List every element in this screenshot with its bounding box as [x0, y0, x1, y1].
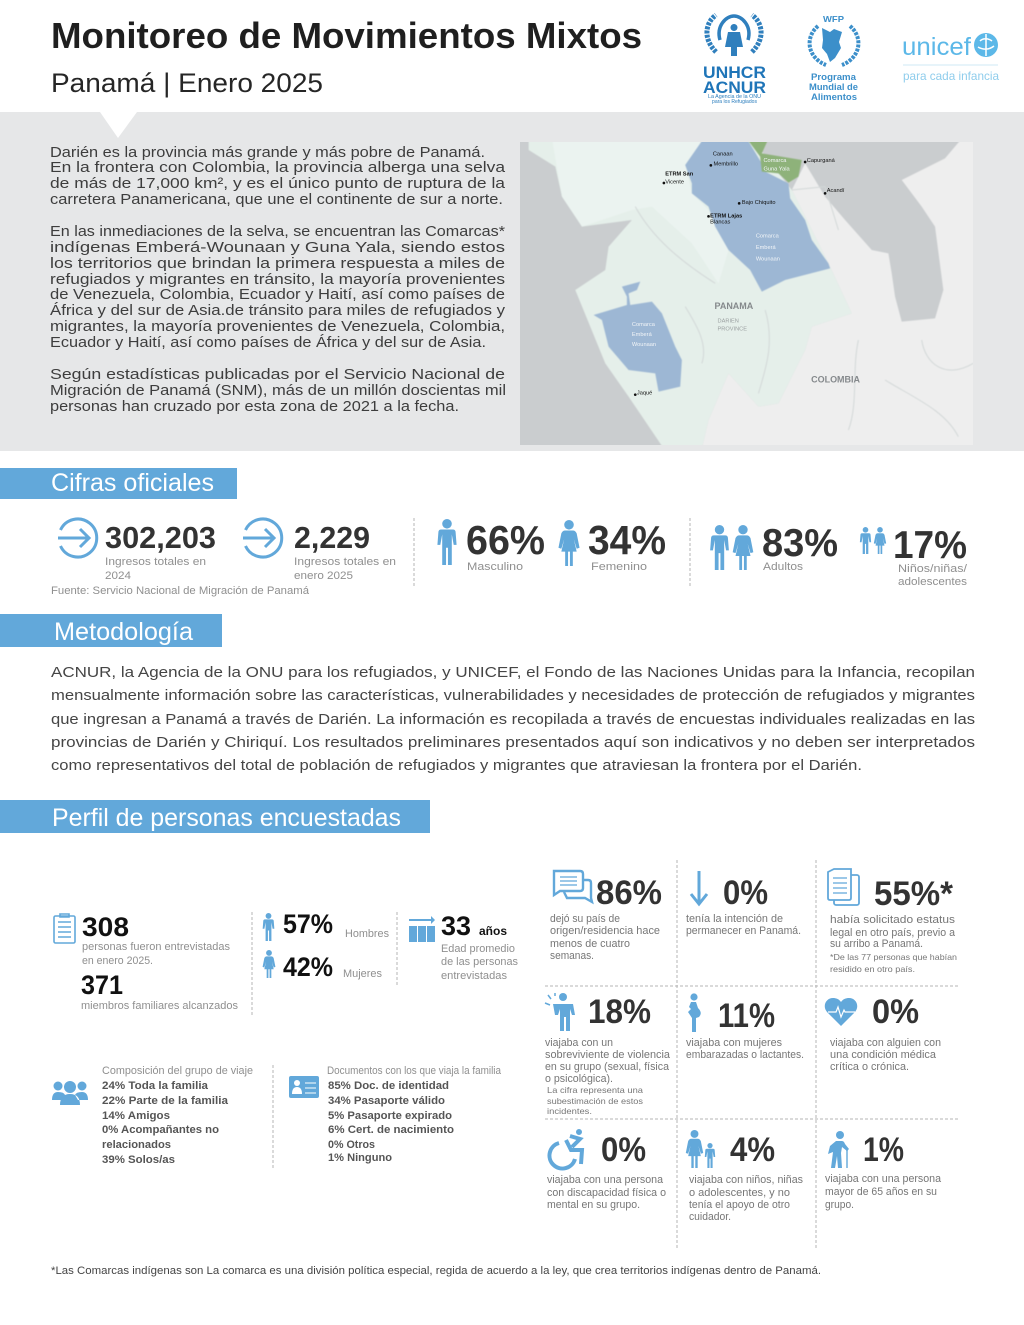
map: Darién province: Vicente	[665, 180, 684, 186]
stat: 33 years: Edad promedio	[441, 943, 515, 955]
cell: 11%: 11%	[718, 997, 775, 1035]
cell: 0% medical: crítica o crónica.	[830, 1061, 909, 1073]
cell: 11%	[686, 993, 804, 1061]
stat: 17% children: adolescentes	[898, 576, 968, 588]
stat: 2,229: enero 2025	[294, 570, 353, 582]
cell: 86%: semanas.	[550, 950, 594, 962]
context text: Según estadísticas publicadas por el Servicio Nacional de	[50, 366, 505, 383]
text: methodology: mensualmente información sobre las características, vulnerabilidades y necesidades de protección de refugiados y migrantes	[51, 687, 975, 704]
map: Darién province: Wounaan	[632, 342, 656, 348]
cell: 86%: 86%	[596, 874, 662, 912]
subtitle: Panamá | Enero 2025	[51, 68, 323, 98]
panel: context band	[0, 112, 1024, 451]
logo: UNHCR ACNUR: UNHCR	[703, 63, 766, 82]
stat: 57% men: Hombres	[345, 928, 389, 940]
icon: elderly person	[828, 1131, 849, 1168]
logo: UNHCR ACNUR: para los Refugiados	[712, 99, 757, 105]
cell: 0% intend to stay	[686, 871, 801, 937]
icon: pregnant woman	[688, 993, 701, 1032]
logo: WFP	[809, 14, 858, 102]
text: documents list: 6% Cert. de nacimiento	[328, 1124, 454, 1136]
cell: 18%: en su grupo (sexual, física	[545, 1061, 670, 1073]
context text	[50, 144, 506, 415]
panel: travel group composition	[52, 1065, 253, 1166]
icon: entry arrow 2024	[58, 519, 97, 557]
stat: 83% adultos: Adultos	[763, 561, 804, 573]
cell: 4%: o adolescentes, y no	[689, 1187, 790, 1199]
cell: 1%: mayor de 65 años en su	[825, 1186, 937, 1198]
icon: documents	[828, 869, 859, 905]
heading: Perfil de personas encuestadas: Perfil de personas encuestadas	[52, 804, 401, 832]
context text: Darién es la provincia más grande y más pobre de Panamá.	[50, 144, 485, 161]
map: Darién province: PANAMA	[715, 301, 754, 311]
icon: wheelchair	[549, 1130, 582, 1169]
context text: refugiados y migrantes en tránsito, la mayoría provenientes	[50, 271, 505, 288]
icon: adult with child	[686, 1130, 715, 1168]
stat: 17% children: Niños/niñas/	[898, 563, 968, 575]
heading: Perfil de personas encuestadas	[0, 800, 430, 833]
cell: 18%: incidentes.	[547, 1106, 592, 1116]
stat: 33 years: entrevistadas	[441, 970, 507, 982]
text: composition list: relacionados	[102, 1139, 171, 1151]
text: composition list: 39% Solos/as	[102, 1154, 175, 1166]
text: documents list: 5% Pasaporte expirado	[328, 1110, 452, 1122]
cell: 86%: menos de cuatro	[550, 938, 630, 950]
icon: clipboard	[54, 914, 75, 943]
stat: 17% children: 17%	[893, 524, 967, 567]
map: Darién province: COLOMBIA	[811, 375, 861, 385]
heading: Metodología: Metodología	[54, 618, 193, 646]
cell: 0% disability: 0%	[601, 1131, 646, 1169]
stat: 33 years	[441, 911, 518, 982]
cell: 86%: origen/residencia hace	[550, 925, 660, 937]
stat: 66% masculino: 66%	[466, 517, 545, 563]
stat: 33 years: de las personas	[441, 956, 518, 968]
stat: 302,203: Ingresos totales en	[105, 556, 206, 568]
cell: 0% medical: una condición médica	[830, 1049, 937, 1061]
cell: 11%: viajaba con mujeres	[686, 1037, 782, 1049]
text: methodology: que ingresan a Panamá a través de Darién. La información es recopilada a través de encuestas individuales realizadas en las	[51, 711, 975, 728]
cell: 18%: sobreviviente de violencia	[545, 1049, 671, 1061]
stat: 308 interviewed: personas fueron entrevistadas	[82, 941, 230, 953]
context text: de más de 17,000 km², y es el único punto de ruptura de la	[50, 175, 506, 192]
text: composition list: 22% Parte de la familia	[102, 1095, 229, 1107]
panel: official figures	[51, 517, 968, 597]
map: Darién province: Blancas	[710, 220, 730, 226]
map: Darién province: Jaqué	[637, 391, 652, 397]
stat: 83% adultos: 83%	[762, 522, 838, 565]
cell: 11%: embarazadas o lactantes.	[686, 1049, 804, 1061]
text: composition list: 24% Toda la familia	[102, 1080, 209, 1092]
map: Darién province: Comarca	[632, 322, 656, 328]
cell: 0% disability	[547, 1130, 666, 1211]
cell: 55%	[828, 869, 957, 974]
cell: 0% medical: 0%	[872, 993, 919, 1031]
stat: 42% women: Mujeres	[343, 968, 382, 980]
stat: 302,203	[105, 520, 216, 582]
map: Darién province	[520, 142, 972, 445]
stat: 57% men	[283, 909, 389, 940]
map: Darién province: Comarca	[763, 158, 787, 164]
cell: 0% medical	[825, 993, 941, 1073]
text: documents list: Documentos con los que viaja la familia	[327, 1065, 502, 1077]
stat: 42% women: 42%	[283, 952, 333, 982]
cell: 4%: 4%	[730, 1131, 775, 1169]
icon: down arrow	[691, 871, 707, 904]
text: composition list: 14% Amigos	[102, 1110, 170, 1122]
cell: 55%: había solicitado estatus	[830, 914, 956, 926]
cell: 0% intend to stay: tenía la intención de	[686, 913, 783, 925]
context text: migrantes, la mayoría provenientes de Venezuela, Colombia,	[50, 318, 505, 335]
text: composition list	[102, 1065, 253, 1166]
cell: 18%	[545, 993, 671, 1116]
panel: respondents summary	[54, 909, 518, 1015]
text: methodology: ACNUR, la Agencia de la ONU para los refugiados, y UNICEF, el Fondo de las Naciones Unidas para la Infancia, recopilan	[51, 664, 975, 681]
icon: ID card	[289, 1076, 319, 1098]
stat: 33 years: años	[479, 924, 507, 938]
context text: Migración de Panamá (SNM), más de un millón doscientas mil	[50, 382, 506, 399]
text: documents list: 85% Doc. de identidad	[328, 1080, 449, 1092]
cell: 18%: 18%	[588, 993, 651, 1031]
stat: 33 years: 33	[441, 911, 471, 941]
heading: Cifras oficiales	[0, 468, 237, 499]
source note: Fuente: Servicio Nacional de Migración de Panamá	[51, 585, 310, 597]
context text: En la frontera con Colombia, la provincia alberga una selva	[50, 159, 506, 176]
map: Darién province: PROVINCE	[718, 327, 747, 333]
text: methodology: provincias de Darién y Chiriquí. Los resultados preliminares presentados aquí son indicativos y no deben ser interpretados	[51, 734, 975, 751]
cell: 86%	[550, 871, 662, 962]
context text: Ecuador y Haití, así como países de África y del sur de Asia.	[50, 334, 486, 351]
stat: 302,203: 2024	[105, 570, 131, 582]
text: documents list	[327, 1065, 502, 1164]
stat: 371 family members: miembros familiares alcanzados	[81, 1000, 238, 1012]
logo: unicef: unicef	[902, 33, 971, 61]
panel: protection indicators grid	[545, 860, 958, 1250]
logo: unicef	[902, 33, 999, 83]
text: methodology	[51, 664, 975, 774]
cell: 55%: legal en otro país, previo a	[830, 927, 956, 939]
stat: 66% masculino: Masculino	[467, 561, 523, 573]
stat: 34% femenino: Femenino	[591, 561, 647, 573]
stat: 2,229: 2,229	[294, 520, 370, 555]
stat: 308 interviewed: 308	[82, 912, 129, 942]
cell: 1%: viajaba con una persona	[825, 1173, 942, 1185]
map: Darién province: ETRM San	[665, 171, 694, 177]
cell: 4%: cuidador.	[689, 1211, 731, 1223]
stat: 17% children	[893, 524, 968, 588]
cell: 55%: residido en otro país.	[830, 964, 915, 974]
map: Darién province: Emberá	[756, 245, 776, 251]
cell: 0% intend to stay: permanecer en Panamá.	[686, 925, 801, 937]
text: documents list: 0% Otros	[328, 1139, 375, 1151]
cell: 18%: o psicológica).	[545, 1073, 613, 1085]
cell: 18%: subestimación de estos	[547, 1096, 643, 1106]
context text: de Venezuela, Colombia, Ecuador y Haití, así como países de	[50, 286, 505, 303]
icon: heart with pulse	[825, 998, 857, 1026]
logo: WFP: Mundial de	[809, 82, 858, 92]
cell: 0% disability: mental en su grupo.	[547, 1199, 640, 1211]
cell: 4%: tenía el apoyo de otro	[689, 1199, 790, 1211]
map: Darién province: ETRM Lajas	[710, 213, 742, 219]
icon: man	[263, 913, 274, 941]
stat: 371 family members: 371	[81, 970, 123, 1000]
map: Darién province: Guna Yala	[763, 167, 791, 173]
cell: 4%: viajaba con niños, niñas	[689, 1174, 803, 1186]
icon: group of people	[52, 1081, 88, 1105]
context text: En las inmediaciones de la selva, se encuentran las Comarcas*	[50, 223, 505, 240]
cell: 0% disability: con discapacidad física o	[547, 1187, 666, 1199]
context text: carretera Panamericana, que une el continente de sur a norte.	[50, 191, 503, 208]
logo: unicef: para cada infancia	[903, 69, 999, 83]
logo: WFP: WFP	[823, 14, 844, 24]
title: Monitoreo de Movimientos Mixtos	[51, 15, 642, 56]
footnote: *Las Comarcas indígenas son La comarca es una división política especial, regida de acuerdo a la ley, que crea territorios indígenas dentro de Panamá.	[51, 1265, 821, 1277]
stat: 302,203: 302,203	[105, 520, 216, 555]
cell: 0% medical: viajaba con alguien con	[830, 1037, 941, 1049]
icon: adults	[710, 525, 753, 570]
stat: 2,229	[294, 520, 396, 582]
cell: 55%: *De las 77 personas que habían	[830, 952, 957, 962]
text: methodology: como representativos del total de población de refugiados y migrantes que atraviesan la frontera por el Darién.	[51, 757, 862, 774]
map: Darién province: Bajo Chiquito	[742, 200, 775, 206]
logo: UNHCR ACNUR: La Agencia de la ONU	[708, 94, 761, 100]
panel: travel documents	[289, 1065, 502, 1164]
text: documents list: 1% Ninguno	[328, 1152, 392, 1164]
icon: man	[437, 519, 457, 565]
map: Darién province: Emberá	[632, 332, 653, 338]
logo: UNHCR ACNUR	[703, 15, 766, 105]
map: Darién province: Capurganá	[807, 158, 836, 164]
text: composition list: 0% Acompañantes no	[102, 1124, 219, 1136]
map: Darién province: Acandí	[827, 188, 845, 194]
cell: 0% intend to stay: 0%	[723, 874, 768, 912]
icon: woman	[263, 950, 275, 978]
map: Darién province: Membrillo	[714, 161, 738, 167]
icon: age bars	[409, 916, 435, 942]
logo: WFP: Programa	[811, 72, 857, 82]
icon: woman	[558, 520, 580, 566]
cell: 55%: 55%*	[874, 875, 954, 913]
stat: 2,229: Ingresos totales en	[294, 556, 396, 568]
map: Darién province: Comarca	[756, 233, 780, 239]
map: Darién province: Canaan	[713, 151, 733, 157]
context text: personas han cruzado por esta zona de 2021 a la fecha.	[50, 398, 459, 415]
stat: 308 interviewed	[82, 912, 230, 967]
icon: entry arrow January	[243, 519, 282, 557]
icon: children	[860, 527, 886, 554]
cell: 18%: viajaba con un	[545, 1037, 613, 1049]
map: Darién province: DARIEN	[718, 318, 739, 324]
context text: África y del sur de Asia.de tránsito para miles de refugiados y	[50, 302, 506, 319]
cell: 4%	[686, 1130, 803, 1223]
stat: 42% women	[283, 952, 382, 982]
context text: los territorios que brindan la primera respuesta a miles de	[50, 255, 505, 272]
text: documents list: 34% Pasaporte válido	[328, 1095, 445, 1107]
text: composition list: Composición del grupo de viaje	[102, 1065, 253, 1077]
stat: 371 family members	[81, 970, 238, 1012]
cell: 86%: dejó su país de	[550, 913, 620, 925]
cell: 1%: 1%	[863, 1131, 904, 1169]
cell: 0% disability: viajaba con una persona	[547, 1174, 664, 1186]
cell: 18%: La cifra representa una	[547, 1085, 643, 1095]
icon: survivor of violence	[545, 993, 575, 1031]
stat: 34% femenino: 34%	[588, 517, 666, 563]
context text: indígenas Emberá-Wounaan y Guna Yala, siendo estos	[50, 239, 505, 256]
logo: UNHCR ACNUR: ACNUR	[703, 78, 766, 97]
icon: chat bubbles	[554, 871, 592, 902]
map: Darién province: Wounaan	[756, 257, 780, 263]
cell: 55%: su arribo a Panamá.	[830, 938, 923, 950]
logo: WFP: Alimentos	[811, 92, 857, 102]
stat: 57% men: 57%	[283, 909, 333, 939]
heading: Cifras oficiales: Cifras oficiales	[51, 469, 214, 497]
cell: 1%	[825, 1131, 942, 1211]
stat: 308 interviewed: en enero 2025.	[82, 955, 153, 967]
cell: 1%: grupo.	[825, 1199, 854, 1211]
heading: Metodología	[0, 614, 222, 647]
